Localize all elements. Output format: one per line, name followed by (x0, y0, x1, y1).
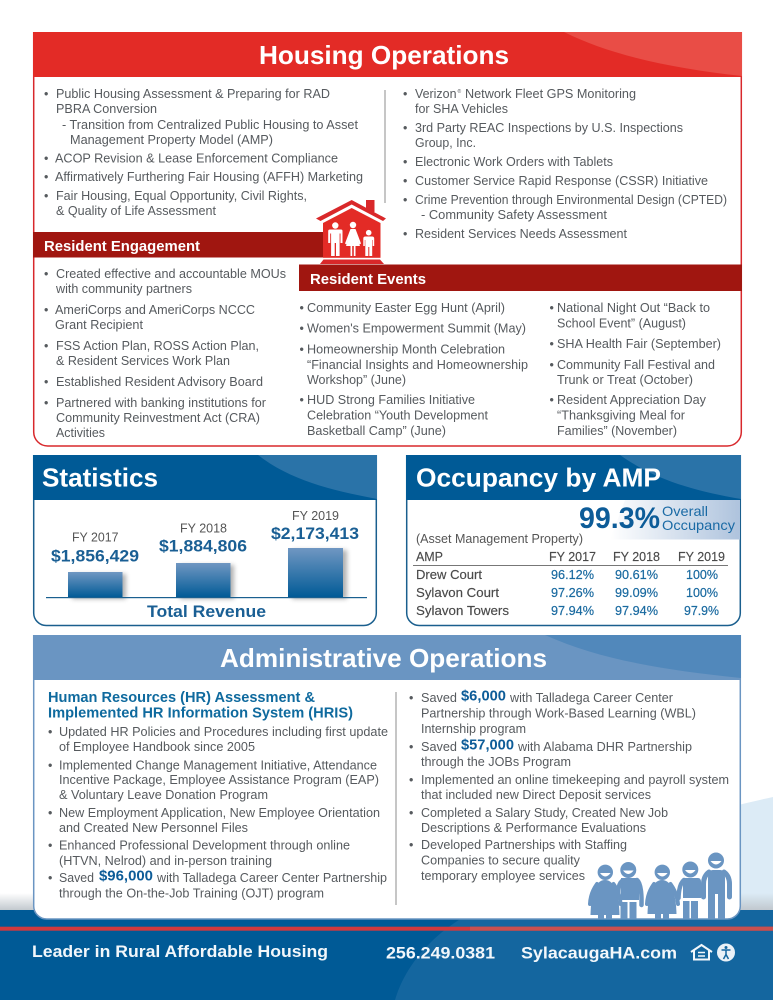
callout: overall occupancy: Overall (662, 503, 708, 519)
chart label: total revenue: Total Revenue (147, 602, 266, 621)
person 4 (678, 862, 701, 919)
panel: administrative operations (33, 635, 741, 919)
text block: HR list right: with Talladega Career Center (509, 691, 673, 705)
row: Drew Court: 90.61% (615, 568, 658, 582)
text block: HR list right: • (409, 740, 413, 754)
subheading band: resident events: Resident Events (310, 272, 426, 288)
subheading band: resident events (299, 264, 742, 291)
panel frame (34, 456, 376, 626)
text block: HR list left: (HTVN, Nelrod) and in-person training (59, 854, 272, 868)
text block: resident engagement list: Activities (56, 426, 105, 440)
table header: FY 2018 (613, 550, 660, 564)
text block: HR list left: Implemented Change Management Initiative, Attendance (59, 758, 377, 772)
text block: HR list left: New Employment Application, New Employee Orientation (59, 806, 380, 820)
table header: AMP (416, 550, 443, 564)
text block: resident engagement list: Created effective and accountable MOUs (56, 267, 286, 281)
text block: HR list left: of Employee Handbook since 2005 (59, 740, 255, 754)
text block: housing list right: • (403, 155, 407, 169)
text block: HR list right: $57,000 (461, 736, 514, 754)
text block: resident events list left: • (300, 322, 304, 336)
text block: HR list right: Descriptions & Performance Evaluations (421, 821, 646, 835)
footer band (0, 910, 773, 1000)
panel frame (34, 33, 741, 446)
text block: resident events list left: • (300, 301, 304, 315)
panel: housing operations (33, 32, 742, 446)
text block: HR list right: Developed Partnerships with Staffing (421, 838, 627, 852)
text block: housing list left: • (44, 152, 48, 166)
text block: resident events list right: SHA Health Fair (September) (557, 337, 721, 351)
text block: HR list left: • (48, 838, 52, 852)
text block: resident engagement list: • (44, 267, 48, 281)
text block: resident events list right: • (550, 337, 554, 351)
row: Sylavon Towers: Sylavon Towers (416, 604, 509, 618)
row: Sylavon Towers: 97.9% (684, 604, 719, 618)
text block: resident engagement list: AmeriCorps and AmeriCorps NCCC (55, 303, 255, 317)
bar: FY 2017 (51, 531, 139, 598)
text block: resident engagement list: Established Resident Advisory Board (56, 375, 263, 389)
text block: HR list right: Internship program (421, 722, 526, 736)
text block: resident engagement list: Grant Recipient (55, 318, 144, 332)
bar: FY 2019: $2,173,413 (271, 524, 359, 543)
text block: resident events list left: Basketball Camp” (June) (307, 424, 446, 438)
text block: HR list right: Saved (421, 740, 457, 754)
heading band: occupancy by AMP: Occupancy by AMP (416, 462, 661, 492)
heading band: statistics (33, 455, 377, 500)
person 5 (704, 852, 730, 919)
text block: HR list right (409, 688, 729, 883)
text block: HR list left: Enhanced Professional Development through online (59, 838, 350, 852)
text block: housing list left: • (44, 170, 48, 184)
text block: housing list left: ACOP Revision & Lease Enforcement Compliance (55, 152, 338, 166)
text block: housing list left (44, 87, 363, 218)
subheading: human resources: Human Resources (HR) Assessment & (48, 690, 316, 706)
text block: resident events list left: Homeownership Month Celebration (307, 342, 505, 356)
footer phone: 256.249.0381 (386, 944, 495, 962)
text block: HR list left: Saved (59, 871, 94, 885)
text block: HR list left: • (48, 871, 52, 885)
text block: housing list right: Network Fleet GPS Monitoring (465, 87, 636, 101)
text block: HR list right: • (409, 691, 413, 705)
text block: housing list right: 3rd Party REAC Inspections by U.S. Inspections (415, 121, 683, 135)
table header (413, 550, 728, 566)
text block: HR list right: $6,000 (461, 688, 506, 704)
text block: resident engagement list: • (44, 339, 48, 353)
text block: housing list right: Customer Service Rapid Response (CSSR) Initiative (415, 174, 708, 188)
text block: HR list left (48, 725, 388, 900)
subheading: human resources (48, 690, 353, 722)
row: Sylavon Court: Sylavon Court (416, 586, 500, 600)
text block: housing list right: • (403, 227, 407, 241)
heading band: administrative operations (33, 635, 741, 680)
text block: resident events list left: HUD Strong Families Initiative (307, 393, 475, 407)
text block: resident events list right: • (550, 358, 554, 372)
subheading: human resources: Implemented HR Information System (HRIS) (48, 706, 353, 722)
footer website: SylacaugaHA.com (521, 944, 677, 962)
text block: resident events list right: Families” (November) (557, 424, 677, 438)
text block: HR list right: through the JOBs Program (421, 755, 571, 769)
text block: housing list left: Fair Housing, Equal Opportunity, Civil Rights, (56, 189, 307, 203)
text block: resident events list right: Trunk or Treat (October) (557, 373, 693, 387)
table: occupancy (413, 550, 728, 618)
icon: accessibility (717, 944, 735, 962)
text block: housing list right: • (403, 174, 407, 188)
text block: housing list left: - Transition from Centralized Public Housing to Asset (62, 118, 359, 132)
text block: resident events list left: “Financial Insights and Homeownership (307, 358, 528, 372)
text block: resident engagement list: • (44, 396, 48, 410)
table caption: (Asset Management Property) (416, 532, 583, 546)
text block: housing list right: for SHA Vehicles (415, 102, 508, 116)
text block: housing list right (403, 87, 727, 241)
text block: HR list right: that included new Direct Deposit services (421, 788, 651, 802)
text block: housing list right: - Community Safety Assessment (421, 208, 608, 222)
icon: equal housing (691, 945, 712, 960)
text block: HR list left: • (48, 806, 52, 820)
text block: HR list left: Incentive Package, Employee Assistance Program (EAP) (59, 773, 379, 787)
panel: occupancy by AMP (406, 455, 741, 626)
text block: housing list left: Public Housing Assessment & Preparing for RAD (56, 87, 330, 101)
text block: housing list right: Verizon (415, 87, 457, 101)
text block: HR list left: and Created New Personnel Files (59, 821, 248, 835)
text block: resident engagement list: Partnered with banking institutions for (56, 396, 266, 410)
bar shadows (72, 550, 347, 599)
text block: resident engagement list: Community Reinvestment Act (CRA) (56, 411, 260, 425)
row: Sylavon Court: 100% (686, 586, 718, 600)
person 2 (618, 862, 642, 919)
text block: housing list right: Electronic Work Orders with Tablets (415, 155, 613, 169)
text block: resident events list left: Community Easter Egg Hunt (April) (307, 301, 505, 315)
person 3 (647, 865, 678, 919)
text block: HR list right: Implemented an online timekeeping and payroll system (421, 773, 729, 787)
row: Sylavon Court: 97.26% (551, 586, 594, 600)
text block: HR list right: with Alabama DHR Partnership (517, 740, 692, 754)
text block: resident events list right: Resident Appreciation Day (557, 393, 707, 407)
text block: resident events list right: School Event” (August) (557, 316, 686, 330)
text block: resident engagement list: FSS Action Plan, ROSS Action Plan, (56, 339, 259, 353)
row: Sylavon Court: 99.09% (615, 586, 658, 600)
heading band: occupancy by AMP (406, 455, 741, 500)
panel frame (407, 456, 740, 626)
row: Drew Court: Drew Court (416, 568, 483, 582)
heading band: statistics: Statistics (42, 462, 158, 492)
text block: resident engagement list (44, 267, 286, 440)
panel: statistics (33, 455, 377, 626)
text block: HR list right: Completed a Salary Study, Created New Job (421, 806, 668, 820)
text block: housing list right: • (403, 121, 407, 135)
text block: resident events list left: • (300, 393, 304, 407)
text block: HR list left: through the On-the-Job Training (OJT) program (59, 886, 324, 900)
text block: resident events list left: Women's Empowerment Summit (May) (307, 322, 526, 336)
text block: housing list left: PBRA Conversion (56, 102, 157, 116)
bar: FY 2017: $1,856,429 (51, 547, 139, 566)
text block: housing list right: Resident Services Needs Assessment (415, 227, 628, 241)
subheading band: resident engagement: Resident Engagement (44, 239, 200, 255)
row: Drew Court: 96.12% (551, 568, 594, 582)
bar: FY 2018: FY 2018 (180, 522, 227, 536)
text block: resident events list right: Community Fall Festival and (557, 358, 715, 372)
table header: FY 2017 (549, 550, 596, 564)
text block: resident events list left: • (300, 342, 304, 356)
icon: group of people (590, 852, 730, 919)
text block: resident events list left: Workshop” (June) (307, 373, 406, 387)
text block: housing list right: Crime Prevention through Environmental Design (CPTED) (415, 193, 727, 207)
row: Drew Court: 100% (686, 568, 718, 582)
text block: housing list right: • (403, 193, 407, 207)
text block: resident events list right: • (550, 393, 554, 407)
text block: HR list left: with Talladega Career Center Partnership (156, 871, 387, 885)
family figures (328, 222, 374, 256)
text block: resident events list right: “Thanksgiving Meal for (557, 408, 685, 422)
text block: HR list left: • (48, 725, 52, 739)
text block: HR list left: Updated HR Policies and Procedures including first update (59, 725, 388, 739)
bar: FY 2017: FY 2017 (72, 531, 119, 545)
callout: overall occupancy: 99.3% (579, 502, 660, 535)
heading band: housing operations: Housing Operations (259, 40, 509, 70)
person 1 (590, 865, 620, 919)
text block: housing list left: Affirmatively Furthering Fair Housing (AFFH) Marketing (55, 170, 363, 184)
row: Drew Court (416, 568, 718, 582)
bar chart: total revenue (46, 509, 367, 621)
bar: FY 2018 (159, 522, 247, 598)
text block: resident events list right: • (550, 301, 554, 315)
bar: FY 2018: $1,884,806 (159, 537, 247, 556)
text block: resident events list right: National Night Out “Back to (557, 301, 710, 315)
text block: resident engagement list: • (44, 303, 48, 317)
text block: HR list right: Saved (421, 691, 457, 705)
text block: resident events list left (300, 301, 528, 438)
icon: house with family (316, 200, 386, 264)
bar: FY 2019 (271, 509, 359, 598)
row: Sylavon Towers: 97.94% (615, 604, 658, 618)
text block: HR list left: $96,000 (99, 868, 153, 884)
text block: housing list left: • (44, 87, 48, 101)
heading band: housing operations (33, 32, 742, 77)
heading band: administrative operations: Administrative Operations (220, 643, 547, 673)
panel frame (34, 636, 740, 919)
text block: housing list right: ® (458, 88, 462, 95)
text block: housing list left: & Quality of Life Assessment (56, 204, 217, 218)
text block: HR list right: • (409, 773, 413, 787)
text block: HR list left: • (48, 758, 52, 772)
text block: resident engagement list: • (44, 375, 48, 389)
divider (384, 90, 386, 203)
text block: resident engagement list: with community partners (55, 282, 192, 296)
text block: HR list right: • (409, 806, 413, 820)
text block: housing list right: Group, Inc. (415, 136, 476, 150)
text block: resident events list right (550, 301, 721, 438)
row: Sylavon Court (416, 586, 718, 600)
text block: HR list right: temporary employee services (421, 869, 585, 883)
callout: overall occupancy: Occupancy (662, 517, 735, 533)
callout: overall occupancy (579, 500, 740, 540)
text block: HR list right: Companies to secure quality (421, 854, 581, 868)
row: Sylavon Towers (416, 604, 719, 618)
text block: resident events list left: Celebration “Youth Development (307, 408, 489, 422)
table header: FY 2019 (678, 550, 725, 564)
text block: housing list left: Management Property Model (AMP) (70, 133, 273, 147)
divider (396, 692, 397, 905)
text block: housing list left: • (44, 189, 48, 203)
row: Sylavon Towers: 97.94% (551, 604, 594, 618)
bar: FY 2019: FY 2019 (292, 509, 339, 523)
footer tagline: Leader in Rural Affordable Housing (32, 942, 328, 961)
text block: HR list left: & Voluntary Leave Donation Program (59, 788, 268, 802)
text block: housing list right: • (403, 87, 407, 101)
subheading band: resident engagement (33, 232, 323, 258)
text block: resident engagement list: & Resident Services Work Plan (56, 354, 230, 368)
page background gradient (0, 797, 773, 911)
text block: HR list right: • (409, 838, 413, 852)
text block: HR list right: Partnership through Work-Based Learning (WBL) (421, 706, 696, 720)
